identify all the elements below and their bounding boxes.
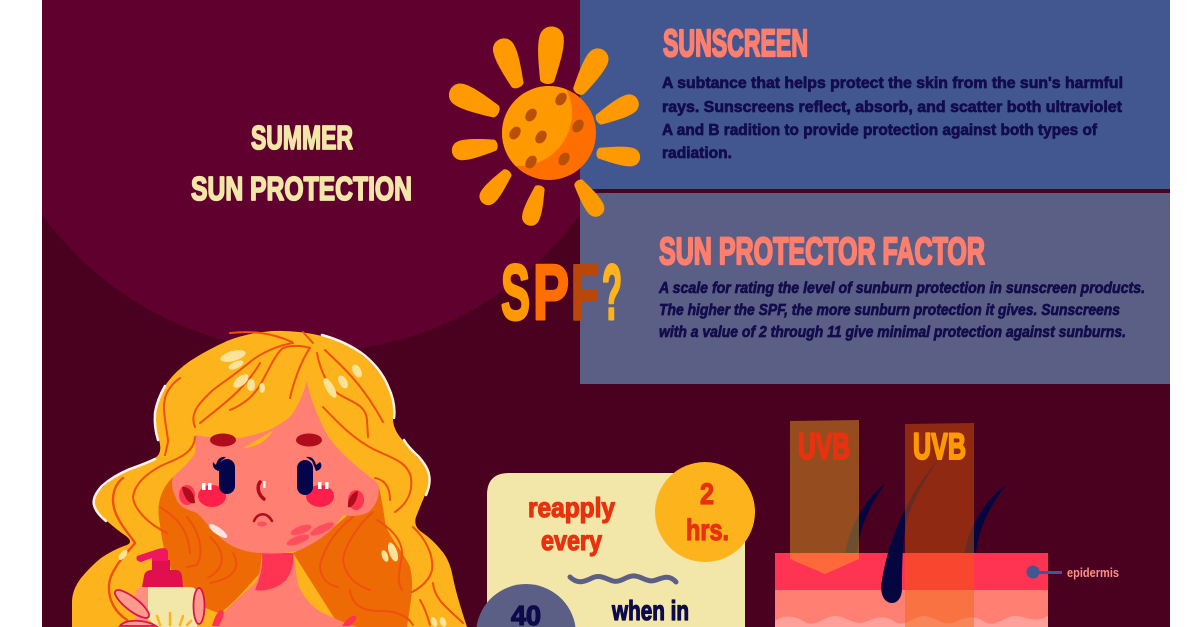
label: epidermis: epidermis: [1067, 565, 1119, 580]
text: reapply every: every: [541, 525, 602, 556]
badge: 2 hrs: [655, 462, 755, 562]
panel: sunscreen: [580, 0, 1170, 189]
panel: sun protector factor: [580, 193, 1170, 384]
sunscreen bottle: [135, 548, 197, 627]
face: [172, 380, 379, 554]
neck shadow: [255, 553, 293, 591]
text: sunscreen definition: radiation.: [662, 145, 732, 162]
text: reapply every: [528, 492, 615, 556]
spf question: [501, 248, 622, 336]
label: epidermis: [1026, 565, 1119, 580]
hair highlights: [117, 348, 448, 627]
text: spf definition: A scale for rating the level of sunburn protection in sunscreen products.: [658, 280, 1145, 297]
title: [191, 119, 412, 207]
hairs: [845, 460, 1006, 603]
text: sunscreen definition: rays. Sunscreens reflect, absorb, and scatter both ultraviolet: [662, 99, 1122, 116]
label: uvb 2: UVB: [913, 426, 966, 467]
text: sunscreen definition: A and B radition to provide protection against both types of: [662, 122, 1098, 139]
hair strands: [109, 332, 463, 625]
heading: sunscreen: SUNSCREEN: [663, 23, 808, 65]
badge: 2 hrs: 2: [700, 478, 714, 511]
hair: [72, 331, 467, 627]
illustration: girl with sunscreen: [72, 331, 467, 627]
body: [213, 553, 357, 627]
text: reapply every: reapply: [528, 492, 615, 523]
hand: [111, 586, 356, 626]
text: sunscreen definition: [662, 75, 1123, 162]
spf question: P: [533, 248, 569, 336]
hair white rim: [94, 335, 430, 521]
text: ?: [602, 248, 622, 336]
fringe curl: [243, 430, 273, 448]
text: sunscreen definition: A subtance that helps protect the skin from the sun's harmful: [662, 75, 1123, 92]
badge: 40 minutes: [476, 584, 576, 627]
skin layers: [775, 553, 1048, 627]
title: SUMMER: [251, 119, 353, 156]
background circle: [42, 0, 596, 348]
wavy divider: [570, 576, 676, 582]
diagram: skin and uv rays: [775, 420, 1119, 627]
card: reapply: [476, 462, 755, 627]
icon: sun: [445, 25, 642, 228]
label: uvb 1: UVB: [798, 426, 850, 467]
face details: [179, 434, 364, 548]
text: spf definition: The higher the SPF, the more sunburn protection it gives. Sunscreens: [659, 302, 1120, 319]
uvb ray 1: [790, 420, 859, 574]
title: SUN PROTECTION: [191, 170, 412, 207]
inner hair shadow: [159, 477, 412, 627]
text: when in: when in: [611, 595, 689, 626]
spf question: F: [571, 248, 599, 336]
uvb ray 2: [905, 423, 974, 627]
badge: 2 hrs: hrs.: [686, 514, 729, 547]
text: spf definition: with a value of 2 through 11 give minimal protection against sunburns.: [659, 324, 1126, 341]
text: spf definition: [658, 280, 1145, 341]
heading: sun protector factor: SUN PROTECTOR FACTOR: [659, 231, 985, 273]
spf question: S: [501, 248, 530, 336]
